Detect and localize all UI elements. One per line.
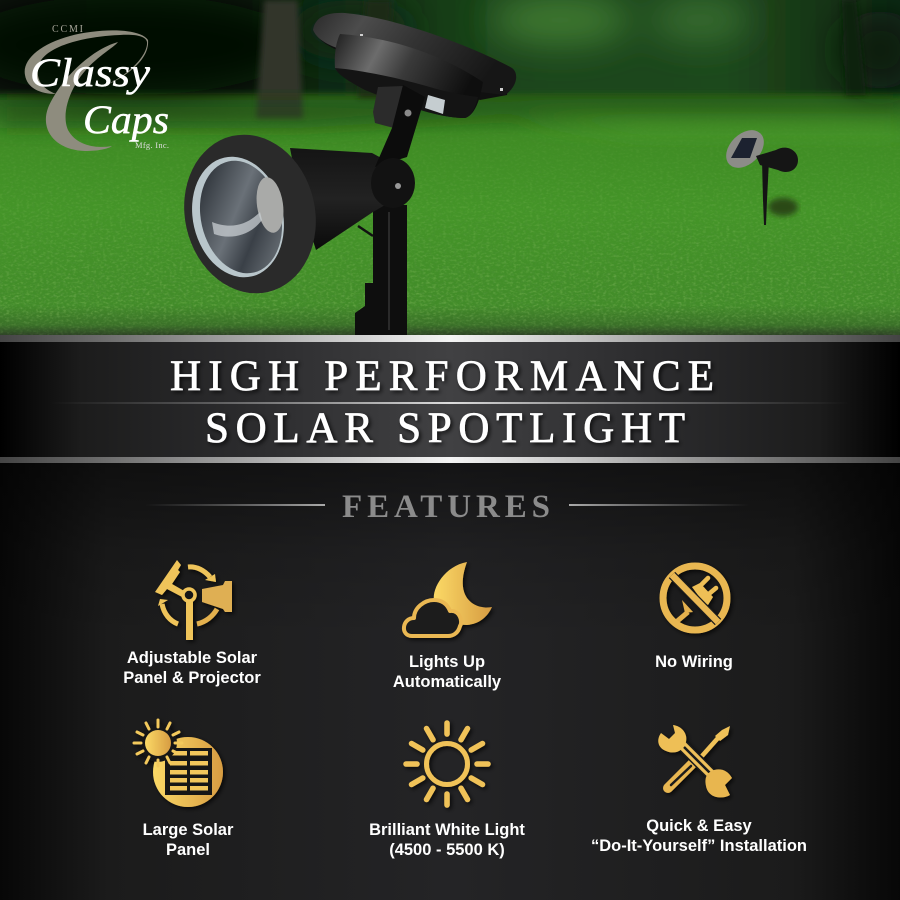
small panel cells: [731, 138, 757, 158]
panel underside: [335, 68, 478, 118]
post: [186, 600, 193, 640]
sun ring: [426, 744, 468, 784]
rotation arrow left: [162, 604, 178, 624]
heading rule right: [569, 504, 749, 506]
panel rim: [313, 13, 516, 95]
ring: [663, 566, 727, 630]
label: Quick & Easy: [646, 817, 753, 835]
solar panel bar: [155, 560, 186, 598]
icon: crossed-out plug: [663, 566, 727, 630]
bracket face: [373, 86, 403, 128]
logo upper swirl: [25, 30, 148, 94]
title band: [0, 335, 900, 463]
logo Classy: Classy: [30, 50, 150, 95]
label: No Wiring: [655, 653, 733, 671]
label: Brilliant White Light: [369, 821, 525, 839]
hinge: [371, 158, 415, 208]
rotation arc right: [197, 609, 217, 624]
panel screws: [360, 34, 503, 91]
small panel: [719, 123, 771, 175]
feature: adjustable: [123, 560, 261, 687]
slash: [672, 575, 718, 622]
projector: [202, 581, 232, 612]
screwdriver handle: [668, 763, 693, 788]
lens streak: [212, 212, 262, 237]
sun backing: [139, 724, 177, 762]
feature: lights up: [393, 562, 502, 691]
small spotlight shadow: [768, 198, 798, 216]
lamp cone: [290, 148, 385, 250]
label: Panel: [166, 841, 210, 859]
lawn: [0, 85, 900, 335]
small lamp: [756, 148, 798, 172]
panel top shade: [0, 463, 900, 900]
lens ring: [180, 147, 296, 287]
screwdriver slot: [671, 766, 691, 785]
stake: [355, 205, 407, 335]
panel cylinder: [335, 34, 483, 118]
heading text: FEATURES: [342, 489, 550, 525]
heading rule left: [145, 504, 325, 506]
stake highlight: [388, 212, 390, 330]
small product photo: [719, 123, 798, 225]
panel frame: [165, 748, 212, 795]
wrench shaft halo: [680, 743, 714, 777]
feature: white light: [369, 723, 525, 859]
label: “Do-It-Yourself” Installation: [591, 837, 807, 855]
feature: no wiring: [655, 566, 733, 671]
wrench slot: [684, 747, 710, 773]
band background: [0, 342, 900, 457]
title line 2: SOLAR SPOTLIGHT: [205, 405, 685, 452]
hub: [183, 589, 195, 601]
bracket screw: [404, 110, 412, 116]
logo Caps: Caps: [83, 97, 169, 142]
small stake: [762, 160, 769, 225]
forest backdrop: [0, 0, 900, 94]
icon: sun: [406, 723, 488, 805]
features panel: [0, 463, 900, 900]
icon: adjustable panel and projector: [155, 560, 232, 640]
lawn shade: [0, 100, 900, 136]
logo Mfg Inc: Mfg. Inc.: [135, 140, 169, 150]
moon: [434, 562, 492, 625]
logo main bowl: [46, 42, 118, 151]
label: Adjustable Solar: [127, 649, 258, 667]
plug lower: [682, 600, 693, 613]
top silver bar: [0, 335, 900, 342]
title line 1: HIGH PERFORMANCE: [170, 353, 714, 400]
cloud: [404, 600, 461, 636]
disc: [153, 737, 223, 807]
grass texture: [0, 154, 900, 335]
screwdriver shaft: [702, 738, 718, 756]
photo: garden background: [0, 0, 900, 335]
icon: wrench and screwdriver: [658, 725, 732, 798]
lamp bezel: [169, 121, 331, 307]
rotation arrow top: [188, 567, 210, 577]
label: Automatically: [393, 673, 502, 691]
sun rays: [406, 723, 488, 805]
panel rim underside: [313, 20, 510, 100]
icon: moon and cloud: [404, 562, 492, 636]
wrench head top: [658, 725, 686, 753]
foliage tones: [0, 0, 900, 95]
plug prongs: [702, 578, 716, 593]
tree trunks: [256, 0, 866, 118]
main product photo: spotlight: [169, 13, 516, 335]
feature: large panel: [134, 720, 234, 859]
screwdriver blade: [715, 726, 730, 741]
label: (4500 - 5500 K): [389, 841, 505, 859]
panel cells: [170, 751, 208, 790]
sun rays: [134, 720, 182, 766]
label: Panel & Projector: [123, 669, 261, 687]
logo: Classy Caps: [25, 24, 169, 151]
wire: [358, 226, 373, 236]
arrow head top: [205, 574, 216, 582]
lens reflector: [189, 152, 293, 282]
sun: [145, 730, 171, 756]
feature: installation: [591, 725, 807, 855]
hinge screw: [395, 183, 401, 189]
lens highlight: [253, 175, 287, 235]
wrench head bottom: [705, 769, 732, 798]
wrench shaft: [680, 743, 714, 777]
icon: sun and solar panel: [134, 720, 223, 807]
title divider: [50, 402, 850, 404]
label: Large Solar: [143, 821, 234, 839]
bracket arm: [375, 85, 425, 167]
plug body: [692, 583, 713, 605]
panel background: [0, 463, 900, 900]
arrow head left: [158, 599, 168, 606]
logo CCMI: CCMI: [52, 24, 83, 35]
cable: [675, 612, 688, 623]
panel nut: [425, 95, 445, 114]
label: Lights Up: [409, 653, 485, 671]
bottom silver bar: [0, 457, 900, 463]
